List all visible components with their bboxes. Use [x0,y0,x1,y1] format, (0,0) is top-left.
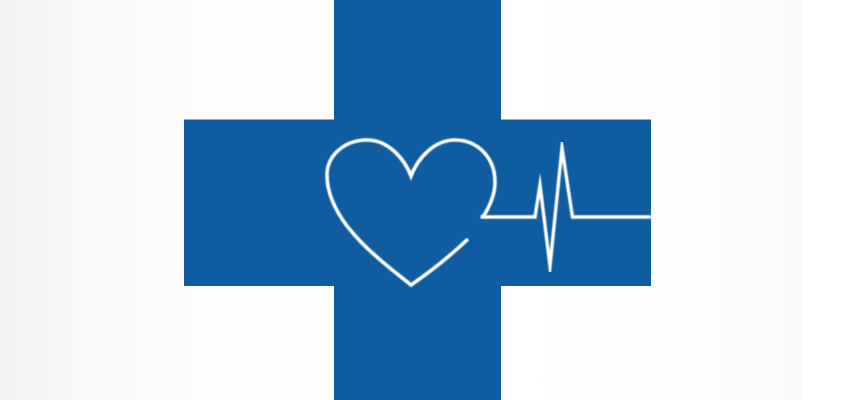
icon: pulse line [480,148,651,266]
icon: heart outline [327,140,495,285]
blue cross [184,0,651,400]
